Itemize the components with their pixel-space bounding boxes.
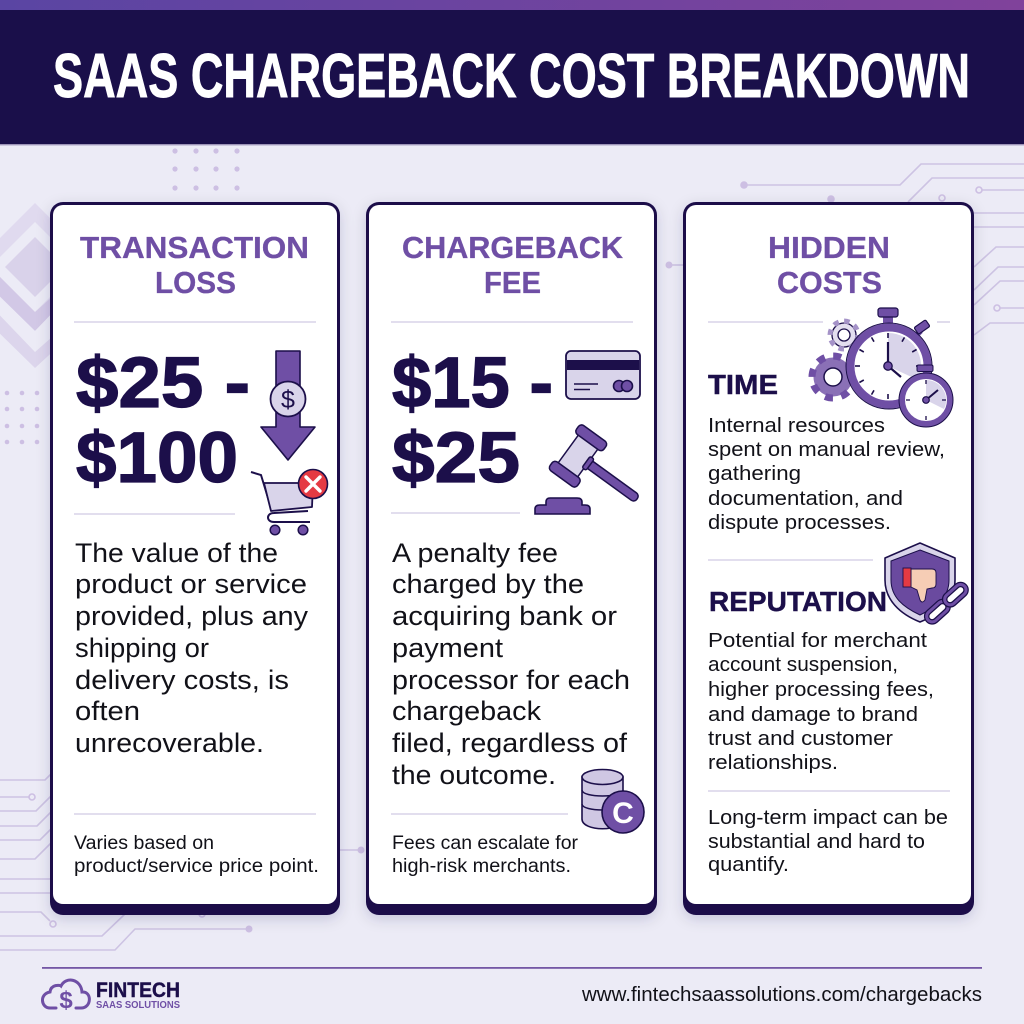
heading: hidden costs	[768, 230, 890, 300]
time description	[708, 414, 945, 534]
footnote	[74, 833, 319, 877]
subheading: time: TIME	[708, 369, 778, 400]
heading: transaction loss	[80, 230, 309, 300]
heading: hidden costs: HIDDEN	[768, 230, 890, 265]
time description: documentation, and	[708, 487, 903, 510]
description text: the outcome.	[392, 760, 556, 790]
description text: provided, plus any	[75, 601, 309, 631]
heading: transaction loss: LOSS	[155, 265, 236, 300]
icon: coin stack: C	[612, 797, 634, 830]
footnote: high-risk merchants.	[392, 856, 571, 877]
amount: $15 - $25: $25	[392, 419, 520, 498]
description text: often	[75, 696, 140, 726]
footnote	[392, 833, 579, 877]
reputation description: higher processing fees,	[708, 678, 934, 701]
panel: transaction loss	[50, 202, 340, 915]
panel: hidden costs	[683, 202, 974, 915]
time description: gathering	[708, 462, 801, 485]
reputation description: and damage to brand	[708, 703, 918, 726]
footnote: Fees can escalate for	[392, 833, 579, 854]
icon: shopping cart with red x	[251, 470, 328, 535]
subheading: reputation: REPUTATION	[709, 586, 887, 617]
amount: $15 - $25: $15 -	[392, 344, 553, 423]
footnote: product/service price point.	[74, 856, 319, 877]
footer logo: SAAS SOLUTIONS	[96, 1000, 180, 1011]
icon: cloud with dollar: $	[59, 987, 73, 1014]
time description: Internal resources	[708, 414, 885, 437]
long-term note: Long-term impact can be	[708, 806, 948, 829]
icon: gears and stopwatches	[812, 308, 953, 427]
icon: credit card	[566, 351, 640, 399]
panel: chargeback fee	[366, 202, 657, 915]
description text: filed, regardless of	[392, 728, 628, 758]
heading: chargeback fee	[402, 230, 624, 300]
description text: delivery costs, is	[75, 665, 289, 695]
heading: transaction loss: TRANSACTION	[80, 230, 309, 265]
description text: chargeback	[392, 696, 542, 726]
description text: The value of the	[75, 538, 278, 568]
icon: shield with thumbs down and chain	[885, 543, 968, 624]
amount: $25 - $100: $25 -	[76, 344, 250, 423]
reputation description: account suspension,	[708, 653, 898, 676]
description text: charged by the	[392, 569, 584, 599]
icon: falling dollar arrow: $	[281, 386, 295, 414]
heading: hidden costs: COSTS	[777, 265, 882, 300]
time description: dispute processes.	[708, 511, 891, 534]
amount: $25 - $100	[76, 344, 250, 498]
time description: spent on manual review,	[708, 438, 945, 461]
reputation description: Potential for merchant	[708, 629, 927, 652]
description text	[75, 538, 309, 758]
icon: coin stack	[582, 770, 644, 833]
footer url: www.fintechsaassolutions.com/chargebacks	[581, 984, 982, 1006]
top accent strip	[0, 0, 1024, 10]
heading: chargeback fee: CHARGEBACK	[402, 230, 624, 265]
description text	[392, 538, 630, 790]
description text: processor for each	[392, 665, 630, 695]
icon: falling dollar arrow	[261, 351, 315, 460]
header band	[0, 10, 1024, 145]
amount: $25 - $100: $100	[76, 419, 238, 498]
reputation description: relationships.	[708, 751, 838, 774]
long-term note	[708, 806, 948, 876]
description text: product or service	[75, 569, 307, 599]
description text: shipping or	[75, 633, 209, 663]
long-term note: quantify.	[708, 853, 789, 876]
footer logo	[42, 979, 180, 1014]
description text: unrecoverable.	[75, 728, 264, 758]
background decoration: dots, diamonds and circuit lines	[0, 148, 1024, 950]
footer logo: FINTECH	[96, 979, 180, 1002]
footnote: Varies based on	[74, 833, 214, 854]
long-term note: substantial and hard to	[708, 830, 925, 853]
heading: chargeback fee: FEE	[484, 265, 541, 300]
reputation description	[708, 629, 934, 774]
description text: A penalty fee	[392, 538, 558, 568]
description text: acquiring bank or	[392, 601, 617, 631]
icon: gavel	[535, 423, 654, 522]
footer rule	[42, 967, 982, 969]
amount: $15 - $25	[392, 344, 553, 498]
reputation description: trust and customer	[708, 727, 893, 750]
description text: payment	[392, 633, 504, 663]
